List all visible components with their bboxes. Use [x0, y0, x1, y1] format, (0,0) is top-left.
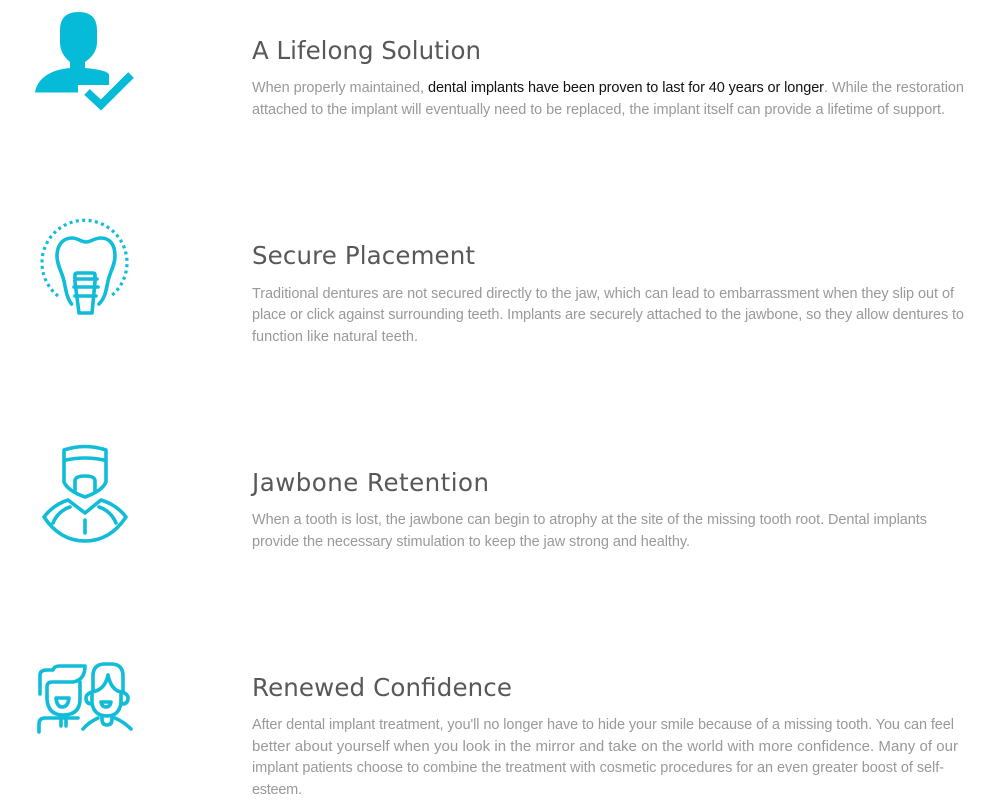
text block: After dental implant treatment, you'll no longer have to hide your smile because of a missing tooth. You can feel	[252, 717, 954, 733]
heading: Jawbone Retention	[250, 468, 489, 497]
icon: smiling man and woman	[39, 664, 131, 732]
heading: Secure Placement	[252, 241, 475, 270]
text block: provide the necessary stimulation to keep the jaw strong and healthy.	[252, 534, 690, 550]
text block	[252, 717, 958, 798]
text block: . While the restoration	[824, 80, 964, 96]
text block: dental implants have been proven to last for 40 years or longer	[428, 80, 824, 96]
panel: renewed confidence	[39, 664, 958, 798]
text block: Traditional dentures are not secured directly to the jaw, which can lead to embarrassment when they slip out of	[252, 286, 955, 302]
text block: better about yourself when you look in the mirror and take on the world with more confidence. Many of our	[252, 738, 958, 755]
icon: dentist with mask	[44, 446, 126, 541]
panel: secure placement	[42, 220, 964, 345]
panel: jawbone retention	[44, 446, 927, 550]
heading: Renewed Confidence	[252, 673, 512, 702]
panel: a lifelong solution	[35, 12, 964, 118]
text block	[252, 512, 927, 550]
text block: place or click against surrounding teeth. Implants are securely attached to the jawbone, so they allow dentures to	[252, 307, 964, 323]
text block: function like natural teeth.	[252, 329, 418, 345]
text block: When properly maintained,	[252, 80, 424, 96]
text block	[252, 286, 964, 345]
icon: tooth implant in dotted circle	[42, 220, 127, 313]
text block: implant patients choose to combine the treatment with cosmetic procedures for an even greater boost of self-	[252, 760, 944, 776]
icon: person with check mark	[35, 12, 131, 105]
text block	[252, 80, 964, 118]
text block: When a tooth is lost, the jawbone can begin to atrophy at the site of the missing tooth root. Dental implants	[252, 512, 927, 528]
heading: A Lifelong Solution	[252, 36, 481, 65]
text block: esteem.	[252, 782, 302, 798]
text block: attached to the implant will eventually need to be replaced, the implant itself can provide a lifetime of support.	[252, 102, 945, 118]
